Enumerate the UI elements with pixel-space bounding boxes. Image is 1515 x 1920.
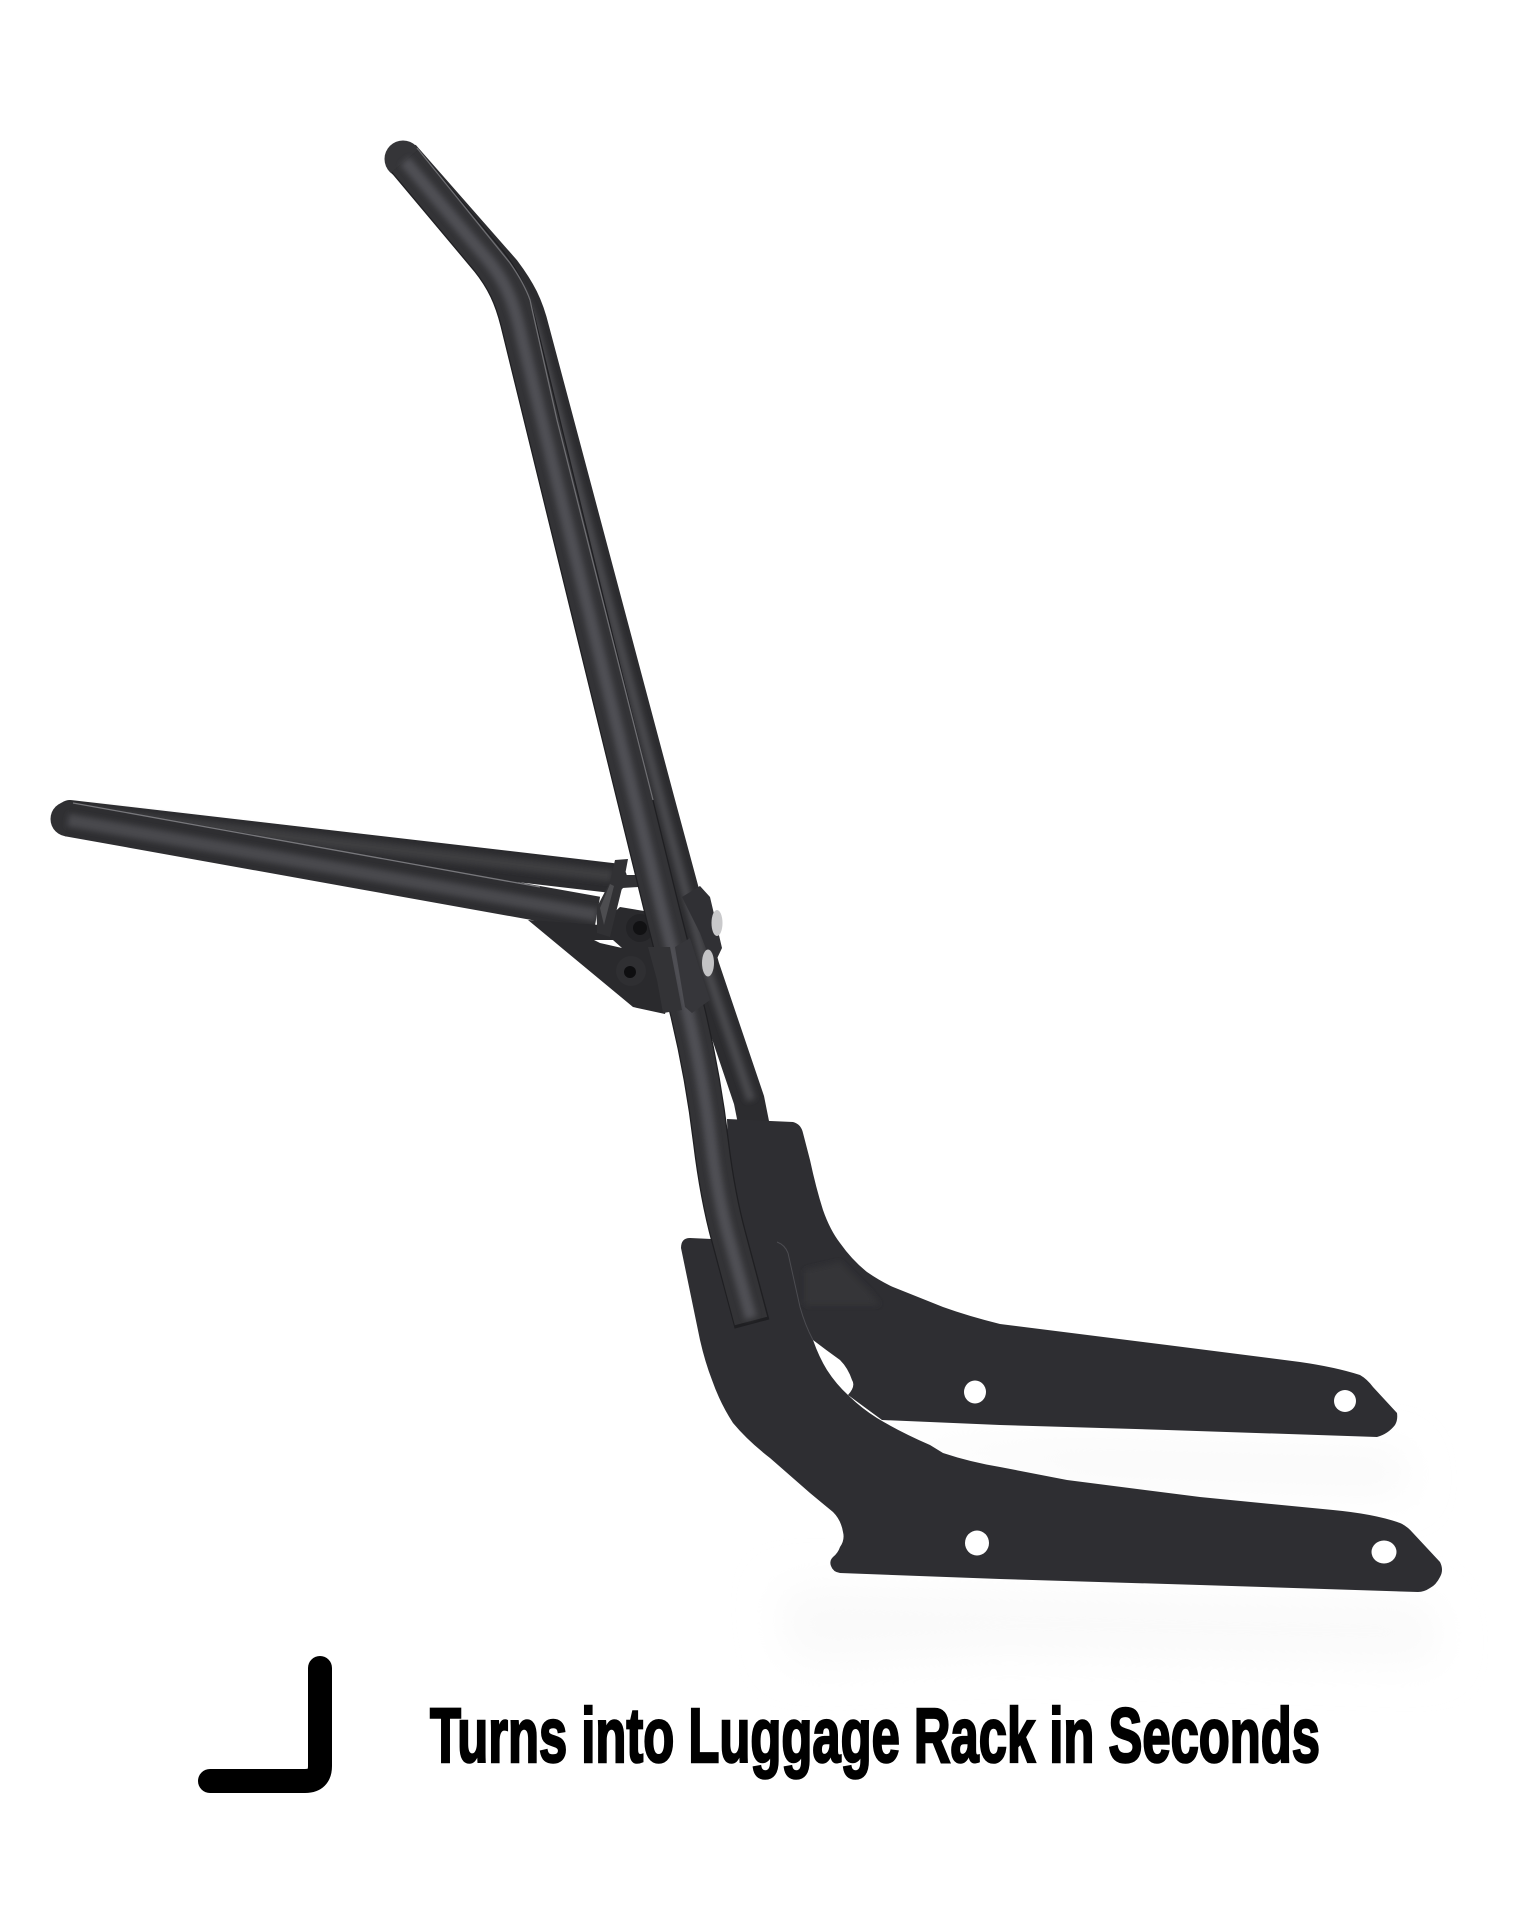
icon: L-shaped rack mode bbox=[210, 1668, 320, 1781]
rear side bracket bbox=[727, 1119, 1397, 1437]
tube clamps with bolts bbox=[648, 886, 722, 1013]
rack clip bbox=[597, 859, 638, 937]
mounting plate bbox=[528, 907, 682, 1014]
upright tube, front bbox=[384, 140, 752, 1324]
upright tube, rear bbox=[404, 155, 754, 1125]
product: sissy bar backrest with luggage rack bbox=[50, 140, 1442, 1592]
horizontal rack tubes bbox=[50, 802, 612, 915]
front side bracket bbox=[681, 1238, 1442, 1592]
